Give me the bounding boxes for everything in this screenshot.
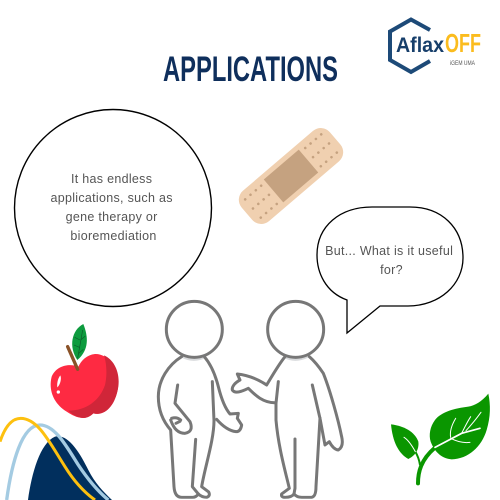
logo: AflaxOFF: iGEM UMA [450, 61, 475, 67]
apple shadow [68, 355, 119, 418]
large leaf [430, 394, 490, 459]
bandage pad [264, 150, 318, 202]
person: left [158, 301, 242, 497]
apple leaf [72, 324, 87, 360]
yellow curve [0, 418, 95, 500]
bubble text: applications: bioremediation [70, 229, 157, 243]
logo: AflaxOFF [390, 20, 481, 72]
apple highlights [57, 375, 61, 387]
bubble text: applications: gene therapy or [66, 210, 158, 224]
decorative curves: bottom left [0, 418, 112, 500]
light blue curve [7, 425, 108, 500]
speech bubble: large circle [14, 110, 212, 306]
person: right [232, 301, 342, 497]
navy hill [28, 436, 112, 500]
icon: apple [51, 324, 119, 418]
bubble text: applications: applications, such as [50, 191, 173, 205]
apple highlight dot [57, 390, 60, 394]
apple stem [68, 347, 78, 369]
people illustration [158, 301, 342, 497]
bubble text: question: But... What is it useful [325, 244, 453, 258]
bubble text: question: for? [380, 263, 403, 277]
small leaf [391, 424, 418, 459]
leaf veins [435, 428, 480, 447]
logo: AflaxOFF: Aflax [396, 34, 444, 57]
bubble text: applications: It has endless [71, 172, 152, 186]
logo: AflaxOFF: OFF [445, 28, 481, 58]
speech bubble: question [317, 207, 463, 333]
icon: bandage [234, 123, 348, 229]
icon: green plant [391, 394, 490, 483]
apple body [51, 354, 118, 418]
title: APPLICATIONS [163, 50, 338, 89]
stem [418, 448, 435, 483]
bandage dots [243, 133, 339, 219]
